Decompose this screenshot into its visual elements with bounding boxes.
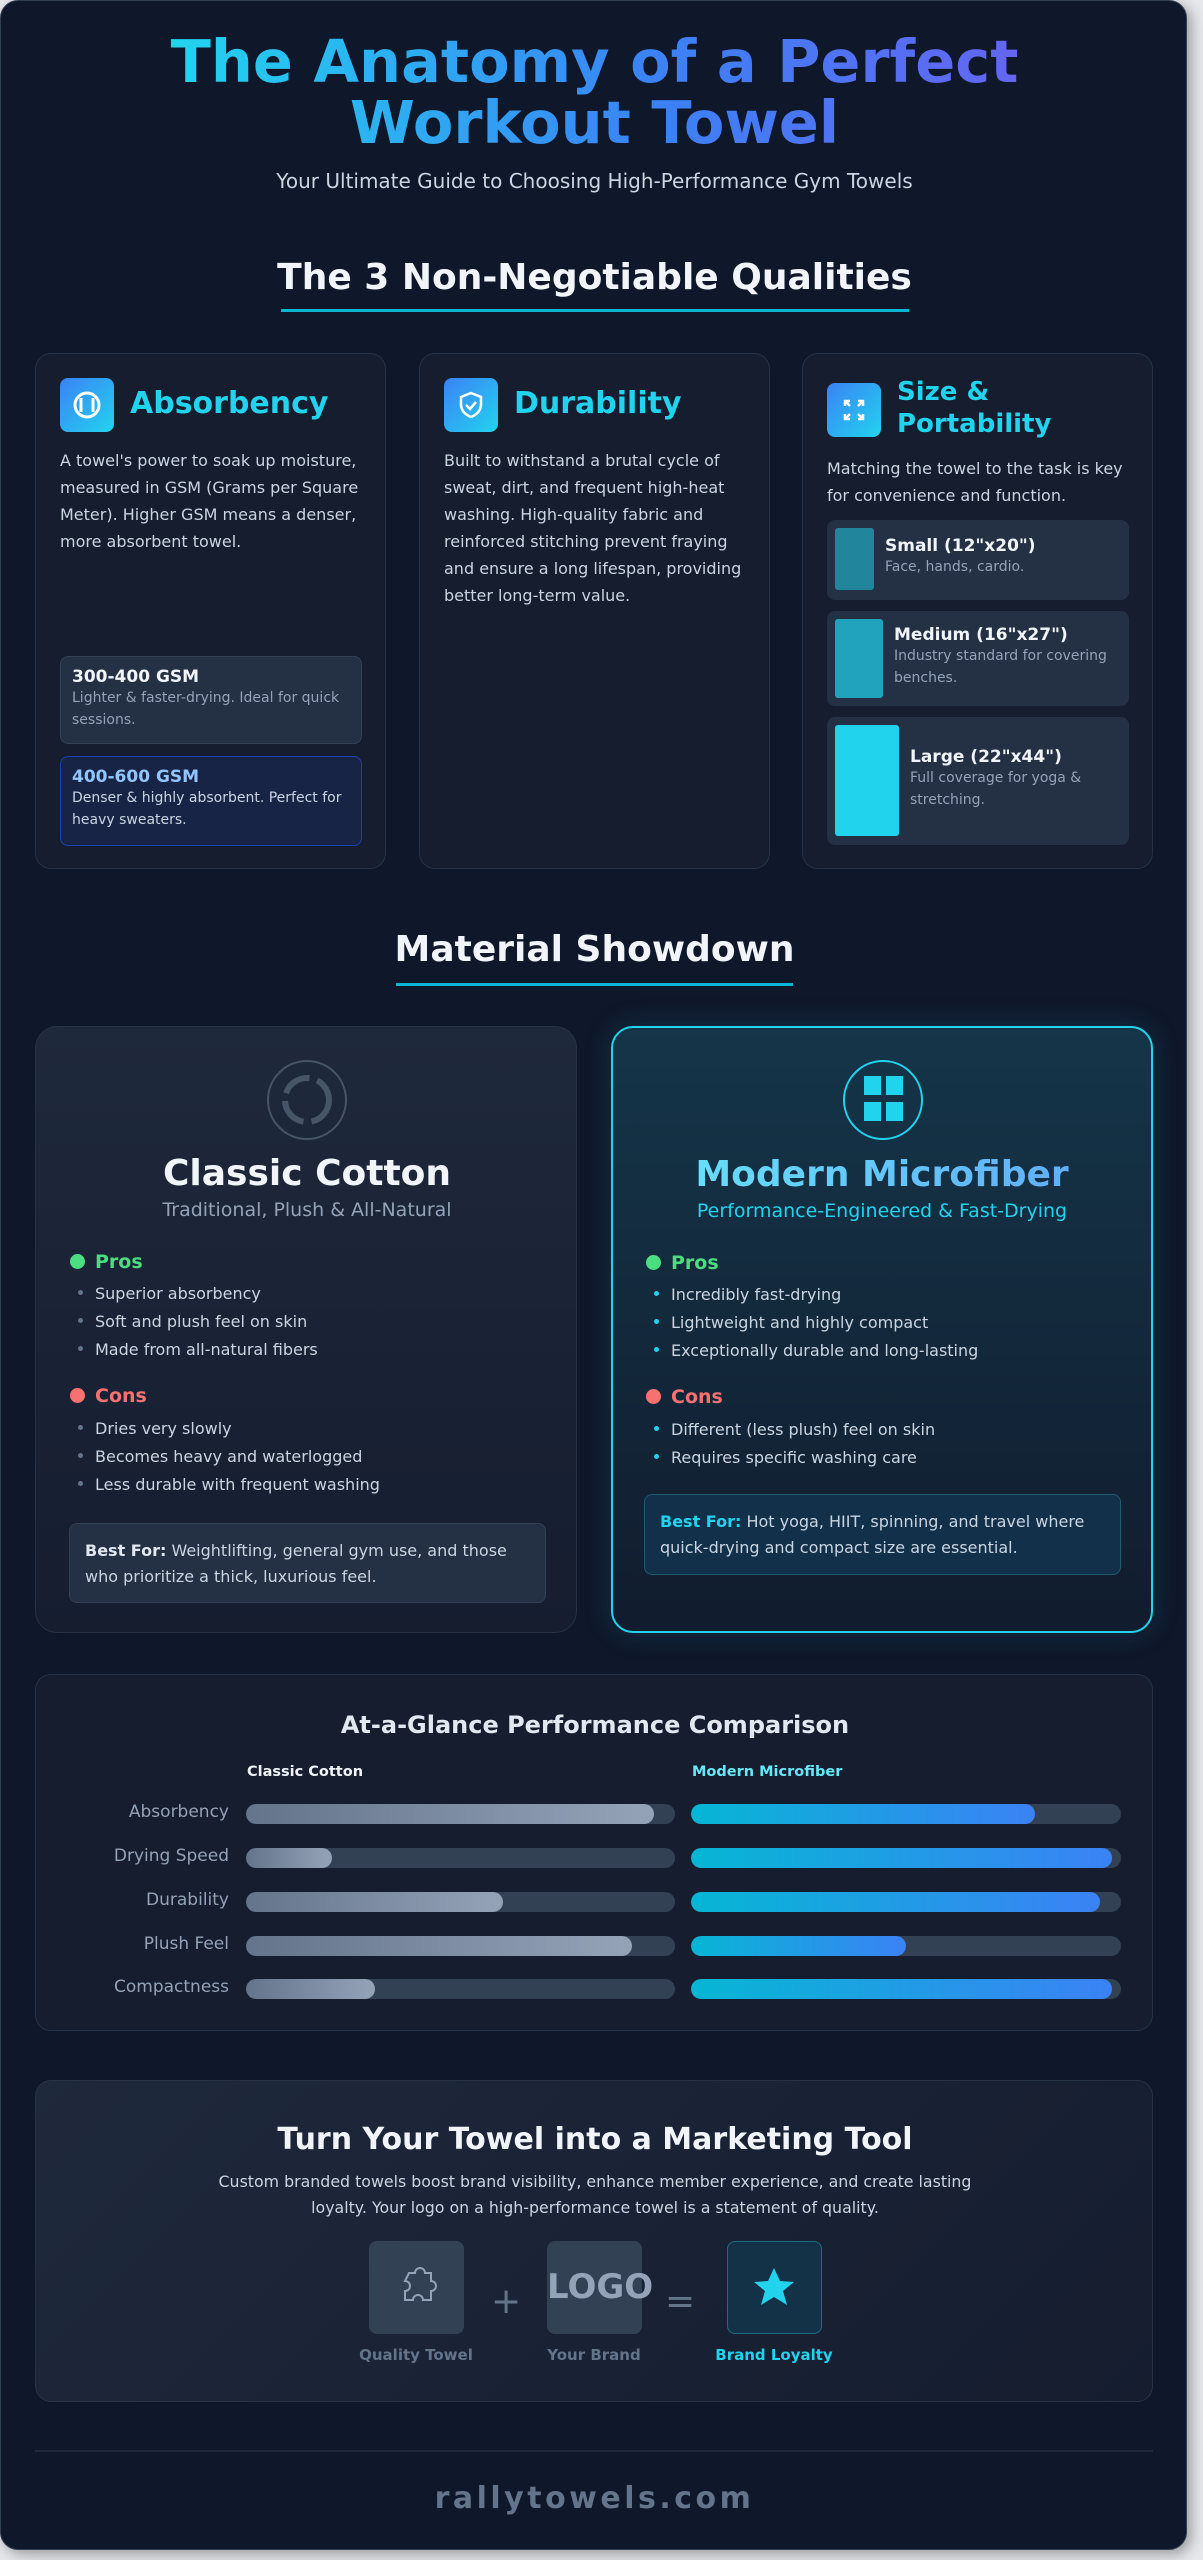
heading: Size & — [897, 377, 989, 407]
equation: logo — [547, 2241, 642, 2334]
size large: Large (22"x44") — [910, 747, 1062, 767]
text: loyalty. Your logo on a high-performance towel is a statement of quality. — [311, 2198, 879, 2217]
title — [613, 1154, 1151, 1195]
bar chart: Drying Speed — [114, 1846, 229, 1866]
title: Modern Microfiber — [695, 1154, 1069, 1195]
icon: cotton — [267, 1060, 347, 1140]
panel: absorbency — [35, 353, 386, 869]
cons: Cons — [95, 1385, 147, 1407]
size small: Face, hands, cardio. — [885, 559, 1024, 575]
panel: marketing: Your Brand — [547, 2346, 641, 2364]
text — [219, 2172, 971, 2217]
panel: marketing: Brand Loyalty — [715, 2346, 833, 2364]
equation: quality towel — [369, 2241, 464, 2334]
bar chart — [114, 1802, 1121, 1999]
size medium: Industry standard for covering benches. — [894, 648, 1107, 686]
icon: expand — [827, 383, 881, 437]
heading: Absorbency — [130, 386, 328, 421]
text: Matching the towel to the task is key for convenience and function. — [827, 459, 1123, 505]
heading — [897, 377, 1051, 439]
gsm box 1: Lighter & faster-drying. Ideal for quick sessions. — [72, 690, 339, 728]
panel: marketing: Quality Towel — [359, 2346, 473, 2364]
size small: Small (12"x20") — [885, 536, 1036, 556]
text: Custom branded towels boost brand visibility, enhance member experience, and create lasting — [219, 2172, 971, 2191]
panel: classic cotton: Less durable with frequent washing — [95, 1475, 380, 1494]
title: Classic Cotton — [163, 1153, 451, 1194]
size medium — [827, 611, 1129, 706]
panel: modern microfiber — [611, 1026, 1153, 1633]
icon: microfiber — [843, 1060, 923, 1140]
icon: shield — [444, 378, 498, 432]
panel: classic cotton: Dries very slowly — [95, 1419, 232, 1438]
panel: modern microfiber: Different (less plush) feel on skin — [671, 1420, 935, 1439]
title: The Anatomy of a Perfect — [171, 27, 1018, 96]
panel: marketing — [35, 2080, 1153, 2402]
panel: classic cotton: Made from all-natural fibers — [95, 1340, 318, 1359]
gsm box 2: Denser & highly absorbent. Perfect for heavy sweaters. — [72, 790, 341, 828]
panel: modern microfiber: Incredibly fast-drying — [671, 1285, 841, 1304]
best for — [69, 1523, 546, 1603]
text: A towel's power to soak up moisture, measured in GSM (Grams per Square Meter). Higher GSM means a denser, more absorbent towel. — [60, 451, 358, 551]
subtitle: Traditional, Plush & All-Natural — [162, 1199, 452, 1221]
panel: classic cotton: Superior absorbency — [95, 1284, 261, 1303]
best for: Best For: Weightlifting, general gym use, and those who prioritize a thick, luxurious feel. — [85, 1541, 507, 1586]
heading: Turn Your Towel into a Marketing Tool — [277, 2122, 913, 2157]
subtitle: Your Ultimate Guide to Choosing High-Performance Gym Towels — [276, 169, 913, 193]
bar chart: Absorbency — [129, 1802, 229, 1822]
panel: modern microfiber: Exceptionally durable and long-lasting — [671, 1341, 978, 1360]
panel: size — [802, 353, 1153, 869]
column headers: Classic Cotton — [247, 1764, 363, 1780]
panel: durability — [419, 353, 770, 869]
panel: modern microfiber: Requires specific washing care — [671, 1448, 917, 1467]
cons — [70, 1385, 147, 1407]
heading: qualities: The 3 Non-Negotiable Qualities — [277, 257, 912, 298]
gsm box 2: 400-600 GSM — [72, 767, 199, 787]
title: Workout Towel — [350, 88, 839, 157]
text: Built to withstand a brutal cycle of sweat, dirt, and frequent high-heat washing. High-quality fabric and reinforced stitching prevent fraying and ensure a long lifespan, providing better long-term value. — [444, 451, 741, 605]
subtitle: Performance-Engineered & Fast-Drying — [697, 1200, 1067, 1222]
equals: = — [665, 2281, 695, 2322]
size medium: Medium (16"x27") — [894, 625, 1068, 645]
gsm box 1 — [60, 656, 362, 744]
pros — [646, 1252, 719, 1274]
bar chart: Durability — [146, 1890, 229, 1910]
pros: Pros — [95, 1251, 143, 1273]
pros — [70, 1251, 143, 1273]
panel: classic cotton: Becomes heavy and waterlogged — [95, 1447, 362, 1466]
panel: classic cotton: Soft and plush feel on skin — [95, 1312, 307, 1331]
size large — [827, 717, 1129, 845]
panel: classic cotton — [35, 1026, 577, 1633]
icon: absorbency — [60, 378, 114, 432]
size large: Full coverage for yoga & stretching. — [910, 770, 1081, 808]
chart title: At-a-Glance Performance Comparison — [341, 1711, 849, 1739]
equation: logo: LOGO — [547, 2267, 653, 2307]
plus: + — [491, 2281, 521, 2322]
gsm box 2 — [60, 756, 362, 846]
panel: performance comparison: Modern Microfiber — [692, 1764, 842, 1780]
footer: website: rallytowels.com — [435, 2481, 754, 2516]
cons — [646, 1386, 723, 1408]
panel: modern microfiber: Lightweight and highly compact — [671, 1313, 928, 1332]
heading: material showdown: Material Showdown — [395, 929, 794, 970]
size small — [827, 520, 1129, 600]
panel: performance comparison — [35, 1674, 1153, 2031]
gsm box 1: 300-400 GSM — [72, 667, 199, 687]
equation: brand loyalty — [727, 2241, 822, 2334]
heading: Portability — [897, 409, 1051, 439]
best for — [644, 1494, 1121, 1575]
title — [1, 31, 1188, 153]
pros: Pros — [671, 1252, 719, 1274]
cons: Cons — [671, 1386, 723, 1408]
bar chart: Compactness — [114, 1977, 229, 1997]
heading: Durability — [514, 386, 682, 421]
best for: Best For: Hot yoga, HIIT, spinning, and travel where quick-drying and compact size are essential. — [660, 1512, 1084, 1557]
bar chart: Plush Feel — [144, 1934, 229, 1954]
